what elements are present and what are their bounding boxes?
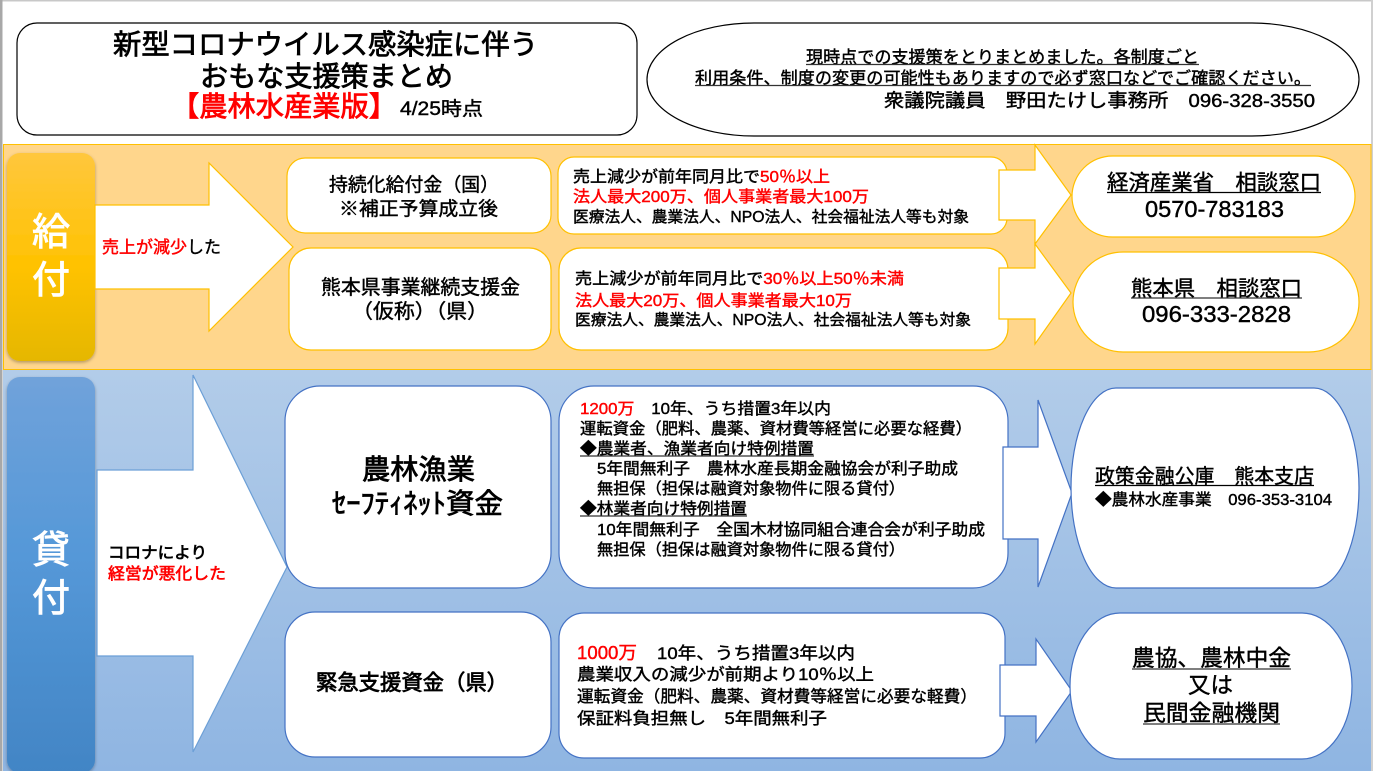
banks text: 農協、農林中金 [1132,645,1291,671]
emergency fund name: 緊急支援資金（県） [316,671,508,695]
grant label bar: 付 [32,260,70,302]
loan label bar [7,377,95,771]
prefecture grant details: 法人最大20万、個人事業者最大10万 [575,292,852,310]
loan condition arrow: 経営が悪化した [108,565,226,583]
prefecture contact: 096-333-2828 [1142,301,1291,327]
title line 1: 新型コロナウイルス感染症に伴う [113,29,538,60]
national contact text: 経済産業省 相談窓口 [1107,171,1321,195]
loan condition arrow [97,375,287,752]
prefecture grant name: 熊本県事業継続支援金 [321,276,520,299]
national grant name: 持続化給付金（国） [329,174,499,196]
date stamp: 4/25時点 [400,98,483,120]
loan label text: 貸 [32,530,70,572]
arrow to prefecture contact [999,244,1071,344]
emergency fund box [285,612,551,757]
prefecture grant details: 医療法人、農業法人、NPO法人、社会福祉法人等も対象 [575,311,971,329]
banks contact: 又は [1188,672,1233,698]
office contact: 衆議院議員 野田たけし事務所 096-328-3550 [884,90,1315,111]
safety net fund details: 10年間無利子 全国木材協同組合連合会が利子助成 [597,521,985,539]
emergency fund details: 農業収入の減少が前期より10％以上 [577,665,874,684]
panel: grants [4,144,1371,370]
finance corporation text: 政策金融公庫 熊本支店 [1095,465,1314,488]
national grant details [558,157,1007,234]
national grant details: 医療法人、農業法人、NPO法人、社会福祉法人等も対象 [573,208,969,226]
safety net fund details: ◆農業者、漁業者向け特例措置 [580,440,814,458]
notice oval [647,23,1359,136]
grant label bar [7,153,95,361]
emergency fund details: 10年、うち措置3年以内 [657,644,855,663]
safety net fund box [285,386,551,588]
arrow to finance corporation [1003,400,1072,587]
emergency fund details [559,613,1005,758]
prefecture grant conditions: 売上減少が前年同月比で 30％以上50％未満 [575,270,904,288]
finance corporation contact [1071,388,1359,588]
safety net fund name: 農林漁業 [362,454,475,485]
title box [17,23,637,135]
banks contact [1070,613,1352,759]
prefecture grant box: （仮称）（県） [352,300,488,323]
national contact: 0570-783183 [1145,196,1284,222]
grant label text: 給 [32,212,70,254]
prefecture grant box [289,248,551,350]
panel: loans [3,370,1371,771]
national grant box [287,158,551,233]
national grant box: ※補正予算成立後 [339,198,498,220]
prefecture grant details [559,248,1008,350]
banks contact: 民間金融機関 [1143,700,1280,726]
title edition in red: 【農林水産業版】 [171,91,397,122]
grant condition text: 売上が減少した [102,238,221,257]
safety net fund details: 運転資金（肥料、農薬、資材費等経営に必要な経費） [580,420,972,438]
safety net fund box: ｾｰﾌﾃｨﾈｯﾄ資金 [332,488,503,519]
finance corporation contact: ◆農林水産事業 096-353-3104 [1095,491,1332,509]
notice line 2: 利用条件、制度の変更の可能性もありますので必ず窓口などでご確認ください。 [695,69,1311,88]
safety net fund details: 5年間無利子 農林水産長期金融協会が利子助成 [597,460,958,478]
safety net fund details [559,386,1008,588]
national grant details: 法人最大200万、個人事業者最大100万 [573,188,869,206]
prefecture contact text: 熊本県 相談窓口 [1131,277,1302,301]
loan label bar: 付 [32,578,70,620]
safety net fund details: ◆林業者向け特例措置 [580,500,747,518]
national contact [1072,156,1355,237]
emergency fund details: 運転資金（肥料、農薬、資材費等経営に必要な軽費） [577,687,977,706]
emergency fund terms: 1000万 [577,643,637,663]
grant condition arrow [95,163,293,331]
prefecture contact [1073,252,1359,352]
title line 2: おもな支援策まとめ [200,61,453,92]
arrow to banks [1000,639,1072,742]
arrow to national contact [999,145,1071,244]
safety net fund details: 無担保（担保は融資対象物件に限る貸付） [597,480,905,498]
loan condition text: コロナにより [108,545,207,562]
emergency fund details: 保証料負担無し 5年間無利子 [577,709,827,728]
notice line 1: 現時点での支援策をとりまとめました。各制度ごと [806,48,1199,67]
safety net fund terms: 1200万 10年、うち措置3年以内 [580,400,831,418]
safety net fund details: 無担保（担保は融資対象物件に限る貸付） [597,541,905,559]
national grant conditions: 売上減少が前年同月比で 50％以上 [573,168,830,186]
